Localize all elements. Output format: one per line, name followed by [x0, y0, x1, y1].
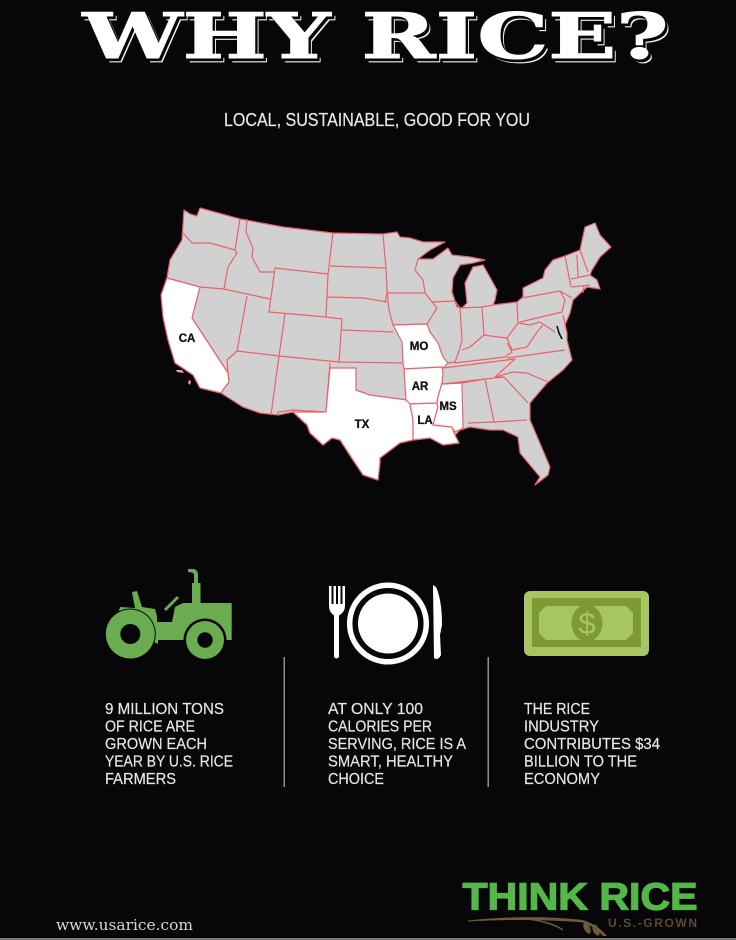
map: Missouri [393, 324, 448, 369]
map: state labels: CA [179, 333, 195, 345]
text: calories: SMART, HEALTHY [328, 754, 453, 770]
website url: www.usarice.com [56, 916, 193, 934]
logo: Think Rice [462, 876, 698, 937]
title: WHY RICE? [81, 0, 669, 73]
map: land outline [161, 208, 611, 485]
text: calories: SERVING, RICE IS A [328, 736, 466, 753]
map: state borders [167, 219, 590, 423]
text: economy: ECONOMY [524, 771, 600, 788]
text: calories [328, 701, 466, 788]
map: Chesapeake Bay [557, 326, 562, 339]
map: state labels: TX [355, 419, 370, 431]
icon: tractor [105, 569, 232, 660]
text: economy: INDUSTRY [524, 718, 599, 736]
divider [488, 657, 489, 787]
text: calories: CHOICE [328, 771, 384, 788]
map: state labels: LA [417, 415, 433, 427]
map: state labels: MO [410, 341, 428, 353]
divider [284, 657, 285, 787]
text: economy: THE RICE [524, 701, 590, 718]
text: economy: BILLION TO THE [524, 754, 637, 770]
map: state labels [179, 333, 457, 431]
text: rice tonnage: 9 MILLION TONS [105, 701, 224, 718]
text: calories: CALORIES PER [328, 718, 432, 736]
map: Louisiana [410, 403, 459, 445]
map of the United States [161, 208, 611, 485]
map: state labels: AR [412, 381, 429, 393]
text: rice tonnage: GROWN EACH [105, 736, 207, 753]
title [81, 0, 672, 77]
map: California islands [176, 370, 191, 385]
text: economy [524, 701, 660, 788]
logo: Think Rice: U.S.-GROWN [608, 916, 697, 930]
text: economy: CONTRIBUTES $34 [524, 736, 660, 753]
icon: dollar bill [524, 591, 649, 656]
map: Texas [293, 368, 413, 480]
map: Arkansas [404, 367, 443, 404]
icon: fork, plate and knife [329, 585, 442, 662]
icon: dollar bill: $ [578, 606, 596, 641]
logo: Think Rice: THINK RICE [462, 876, 698, 918]
subtitle: LOCAL, SUSTAINABLE, GOOD FOR YOU [224, 110, 530, 130]
text: calories: AT ONLY 100 [328, 701, 423, 718]
text: rice tonnage: YEAR BY U.S. RICE [105, 754, 233, 770]
text: rice tonnage: FARMERS [105, 771, 176, 788]
map: California [161, 278, 229, 393]
title: WHY RICE? [85, 3, 672, 77]
title: WHY RICE? [83, 2, 671, 76]
map: state labels: MS [439, 401, 457, 413]
text: rice tonnage [105, 701, 233, 788]
map: Mississippi [433, 383, 463, 432]
text: rice tonnage: OF RICE ARE [105, 718, 195, 736]
